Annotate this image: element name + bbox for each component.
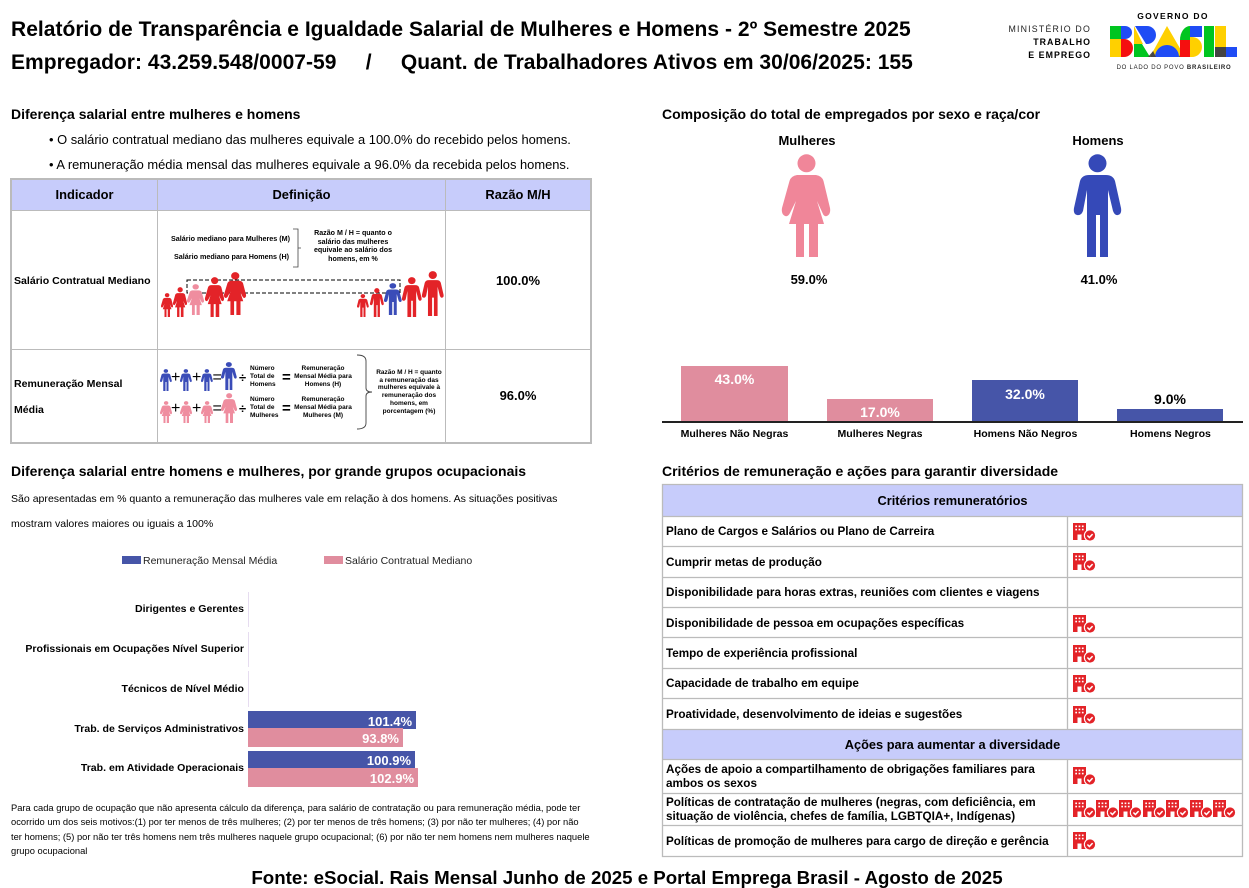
- bar chart: occupations: Trab. de Serviços Administrativos: [74, 723, 244, 735]
- bullet: average remuneration: • A remuneração média mensal das mulheres equivale a 96.0% da recebida pelos homens.: [49, 157, 569, 172]
- text: Capacidade de trabalho em equipe: [666, 677, 859, 690]
- men figure: 41.0%: [1081, 272, 1117, 287]
- diagram: average remuneration definition: ÷: [239, 370, 246, 385]
- diagram: average remuneration definition: +: [192, 400, 201, 417]
- bar chart: sex and race: Mulheres Não Negras: [681, 428, 788, 440]
- bar chart: sex and race: 32.0%: [1005, 386, 1045, 402]
- diagram: average remuneration definition: homens, em: [390, 400, 428, 407]
- diagram: average remuneration definition: =: [212, 400, 222, 417]
- indicator table: Indicador: [55, 187, 114, 202]
- diagram: average remuneration definition: Mulheres: [250, 412, 279, 419]
- panel: composition by sex and race: [662, 106, 1243, 440]
- diagram: median salary definition: Salário mediano para Mulheres (M): [171, 234, 290, 243]
- employer subtitle: Empregador: 43.259.548/0007-59 / Quant. de Trabalhadores Ativos em 30/06/2025: 155: [11, 51, 913, 74]
- text: Cumprir metas de produção: [666, 556, 822, 569]
- diagram: median salary definition: homens, em %: [328, 254, 378, 262]
- diagram: average remuneration definition: remuneração dos: [382, 392, 436, 399]
- diagram: average remuneration definition: [160, 354, 442, 430]
- criteria table: Ações para aumentar a diversidade: [845, 737, 1060, 752]
- text: Políticas de promoção de mulheres para cargo de direção e gerência: [666, 835, 1049, 848]
- bullet: median salary: • O salário contratual mediano das mulheres equivale a 100.0% do recebido pelos homens.: [49, 132, 571, 147]
- legend: [122, 555, 472, 567]
- bar chart: sex and race: 17.0%: [860, 404, 900, 420]
- criteria rows: Plano de Cargos e Salários ou Plano de Carreira: [666, 525, 934, 538]
- diagram: average remuneration definition: Homens: [250, 381, 276, 388]
- icons: building check: [1073, 523, 1236, 850]
- heading: composition: Composição do total de empregados por sexo e raça/cor: [662, 106, 1040, 122]
- diagram: average remuneration definition: =: [282, 400, 291, 416]
- logo: governo do brasil: GOVERNO DO: [1137, 11, 1209, 21]
- panel: salary difference: [10, 106, 592, 444]
- bar chart: occupations: Trab. em Atividade Operacionais: [81, 762, 244, 774]
- diagram: average remuneration definition: porcentagem (%): [383, 408, 435, 415]
- indicator table: Salário Contratual Mediano: [14, 275, 151, 287]
- indicator table: Média: [14, 404, 44, 416]
- footnote: grupo ocupacional: [11, 846, 87, 856]
- women figure: [778, 133, 836, 287]
- indicator table: Definição: [272, 187, 331, 202]
- logo: ministry: [1008, 24, 1091, 60]
- text: Disponibilidade de pessoa em ocupações específicas: [666, 617, 964, 630]
- bar chart: occupations: 101.4%: [368, 714, 412, 729]
- diagram: average remuneration definition: Total de: [250, 404, 274, 411]
- criteria table: [662, 484, 1244, 858]
- logo: ministry: E EMPREGO: [1028, 50, 1091, 60]
- diagram: average remuneration definition: a remuneração das: [379, 377, 439, 384]
- bar chart: sex and race: Homens Não Negros: [974, 428, 1077, 440]
- bar chart: sex and race: 9.0%: [1154, 391, 1186, 407]
- bar chart: occupations: Dirigentes e Gerentes: [135, 603, 244, 615]
- men figure: Homens: [1072, 133, 1124, 148]
- footnote: ocorrido um dos seis motivos:(1) por ter menos de três mulheres; (2) por ter menos de três homens; (3) por não ter mulheres; (4) por não: [11, 817, 579, 827]
- diagram: average remuneration definition: Total de: [250, 373, 274, 380]
- diagram: average remuneration definition: Mensal Média para: [294, 404, 352, 411]
- diagram: median salary definition: Razão M / H = quanto o: [314, 229, 392, 237]
- diagram: median salary definition: Salário mediano para Homens (H): [174, 252, 289, 261]
- diagram: average remuneration definition: =: [212, 369, 222, 386]
- bar chart: occupations: [25, 592, 418, 787]
- panel: occupational groups: [11, 463, 590, 856]
- legend: Salário Contratual Mediano: [345, 555, 472, 567]
- women figure: 59.0%: [791, 272, 827, 287]
- indicator table: Remuneração Mensal: [14, 378, 122, 390]
- diagram: median salary definition: salário das mulheres: [318, 238, 388, 246]
- diagram: median salary definition: [161, 228, 444, 317]
- indicator table: 96.0%: [500, 388, 536, 403]
- bar chart: occupations: 93.8%: [362, 731, 399, 746]
- legend: Remuneração Mensal Média: [143, 555, 277, 567]
- diagram: average remuneration definition: Homens (H): [305, 381, 341, 388]
- heading: occupational groups: Diferença salarial entre homens e mulheres, por grande grupos ocupacionais: [11, 463, 526, 479]
- source footer: Fonte: eSocial. Rais Mensal Junho de 2025 e Portal Emprega Brasil - Agosto de 2025: [251, 867, 1003, 888]
- diagram: average remuneration definition: ÷: [239, 401, 246, 416]
- bar chart: sex and race: Mulheres Negras: [838, 428, 922, 440]
- diagram: average remuneration definition: Mulheres (M): [303, 412, 343, 419]
- bar chart: occupations: 102.9%: [370, 771, 414, 786]
- indicator table: [10, 178, 592, 444]
- text: Disponibilidade para horas extras, reuniões com clientes e viagens: [666, 586, 1040, 599]
- heading: salary difference: Diferença salarial entre mulheres e homens: [11, 106, 300, 122]
- bar chart: sex and race: 43.0%: [715, 371, 754, 387]
- title: Relatório de Transparência e Igualdade Salarial de Mulheres e Homens - 2º Semestre 2025: [11, 18, 911, 41]
- diagram: average remuneration definition: +: [171, 400, 180, 417]
- logo: ministry: TRABALHO: [1033, 37, 1091, 47]
- text: Ações de apoio a compartilhamento de obrigações familiares para: [666, 763, 1035, 776]
- description: São apresentadas em % quanto a remuneração das mulheres vale em relação à dos homens. As situações positivas: [11, 493, 557, 505]
- diagram: average remuneration definition: Número: [250, 365, 275, 372]
- diagram: average remuneration definition: mulheres equivale à: [378, 384, 440, 391]
- men figure: [1072, 133, 1124, 287]
- text: Proatividade, desenvolvimento de ideias e sugestões: [666, 708, 962, 721]
- text: Tempo de experiência profissional: [666, 647, 857, 660]
- diagram: median salary definition: equivale ao salário dos: [314, 246, 392, 254]
- logo: ministry: MINISTÉRIO DO: [1008, 24, 1091, 34]
- heading: criteria: Critérios de remuneração e ações para garantir diversidade: [662, 463, 1058, 479]
- diagram: average remuneration definition: +: [192, 369, 201, 386]
- bar chart: occupations: Técnicos de Nível Médio: [122, 683, 244, 695]
- logo: governo do brasil: [1110, 11, 1237, 71]
- footnote: ter homens; (5) por não ter três homens nem três mulheres naquele grupo ocupacional; (6) por não ter nem homens nem mulheres naquele: [11, 832, 590, 842]
- footnote: [11, 803, 590, 856]
- diagram: average remuneration definition: Número: [250, 396, 275, 403]
- criteria table: Critérios remuneratórios: [877, 493, 1028, 508]
- text: situação de violência, chefes de família, LGBTQIA+, Indígenas): [666, 810, 1015, 823]
- diagram: average remuneration definition: Mensal Média para: [294, 373, 352, 380]
- indicator table: Razão M/H: [485, 187, 551, 202]
- bar chart: sex and race: [662, 366, 1243, 440]
- bar chart: sex and race: Homens Negros: [1130, 428, 1211, 440]
- women figure: Mulheres: [778, 133, 836, 148]
- diagram: average remuneration definition: +: [171, 369, 180, 386]
- bar chart: occupations: 100.9%: [367, 753, 411, 768]
- diagram: average remuneration definition: Remuneração: [302, 365, 344, 372]
- diagram: average remuneration definition: Remuneração: [302, 396, 344, 403]
- logo: governo do brasil: DO LADO DO POVO BRASILEIRO: [1117, 65, 1231, 71]
- panel: occupational groups: mostram valores maiores ou iguais a 100%: [11, 518, 213, 530]
- diagram: average remuneration definition: =: [282, 368, 291, 386]
- text: Políticas de contratação de mulheres (negras, com deficiência, em: [666, 796, 1036, 809]
- bar chart: occupations: Profissionais em Ocupações Nível Superior: [25, 643, 244, 655]
- diagram: average remuneration definition: Razão M / H = quanto: [376, 369, 442, 376]
- footnote: Para cada grupo de ocupação que não apresenta cálculo da diferença, para salário de contratação ou para remuneração média, pode ter: [11, 803, 580, 813]
- indicator table: 100.0%: [496, 273, 540, 288]
- text: ambos os sexos: [666, 777, 757, 790]
